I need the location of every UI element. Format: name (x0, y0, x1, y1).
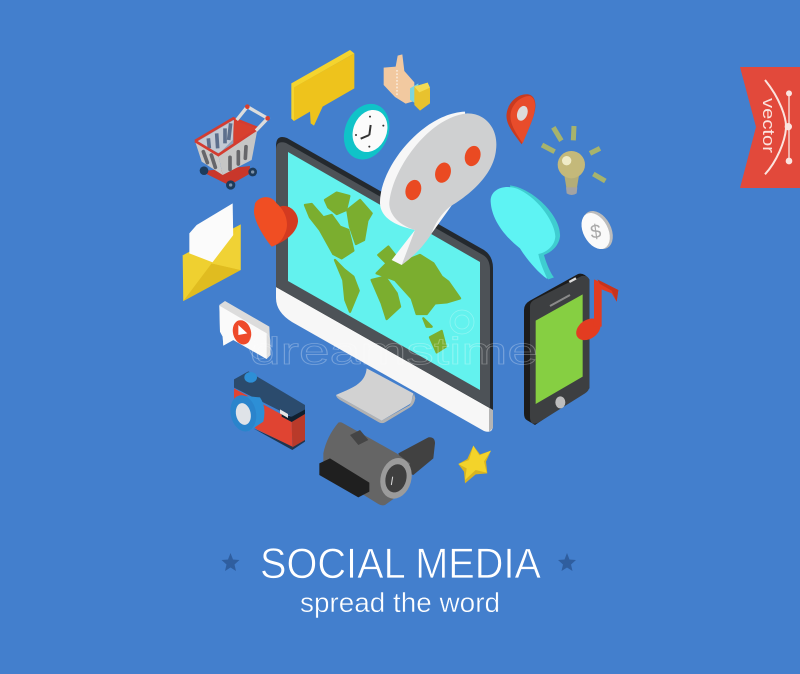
icon: thumbs up (384, 54, 430, 111)
icon: open envelope (183, 203, 241, 301)
subtitle: spread the word (300, 587, 500, 618)
icon: yellow speech bubble (291, 50, 354, 126)
icon: dollar coin (576, 206, 619, 254)
icon: big speech bubble (380, 112, 496, 265)
icon: smartphone (524, 274, 589, 425)
icon: photo camera (227, 371, 305, 450)
monitor screen (288, 152, 480, 390)
icon: cyan speech bubble (491, 185, 560, 279)
monitor (276, 137, 493, 432)
icon: location pin (506, 94, 535, 144)
icon: video camera (319, 422, 435, 505)
watermark (249, 310, 538, 373)
icon: wall clock (336, 97, 397, 166)
ribbon vector curve icon (765, 80, 791, 174)
icon: video speech bubble (219, 301, 271, 359)
ribbon label: vector (759, 98, 778, 153)
icon: light bulb (542, 126, 605, 195)
icon: heart (254, 197, 298, 247)
monitor chin (276, 285, 493, 432)
icon: music note (572, 279, 618, 345)
watermark: dreamstime (250, 331, 538, 373)
ribbon badge (740, 67, 800, 188)
icon: dollar coin: $ (589, 221, 603, 244)
monitor stand (336, 368, 415, 423)
icon: star (458, 446, 491, 483)
right star (558, 553, 576, 571)
world map (305, 193, 460, 352)
monitor bezel (276, 137, 493, 410)
left star (222, 553, 240, 571)
icon: shopping cart (195, 104, 270, 190)
title: SOCIAL MEDIA (260, 540, 541, 588)
